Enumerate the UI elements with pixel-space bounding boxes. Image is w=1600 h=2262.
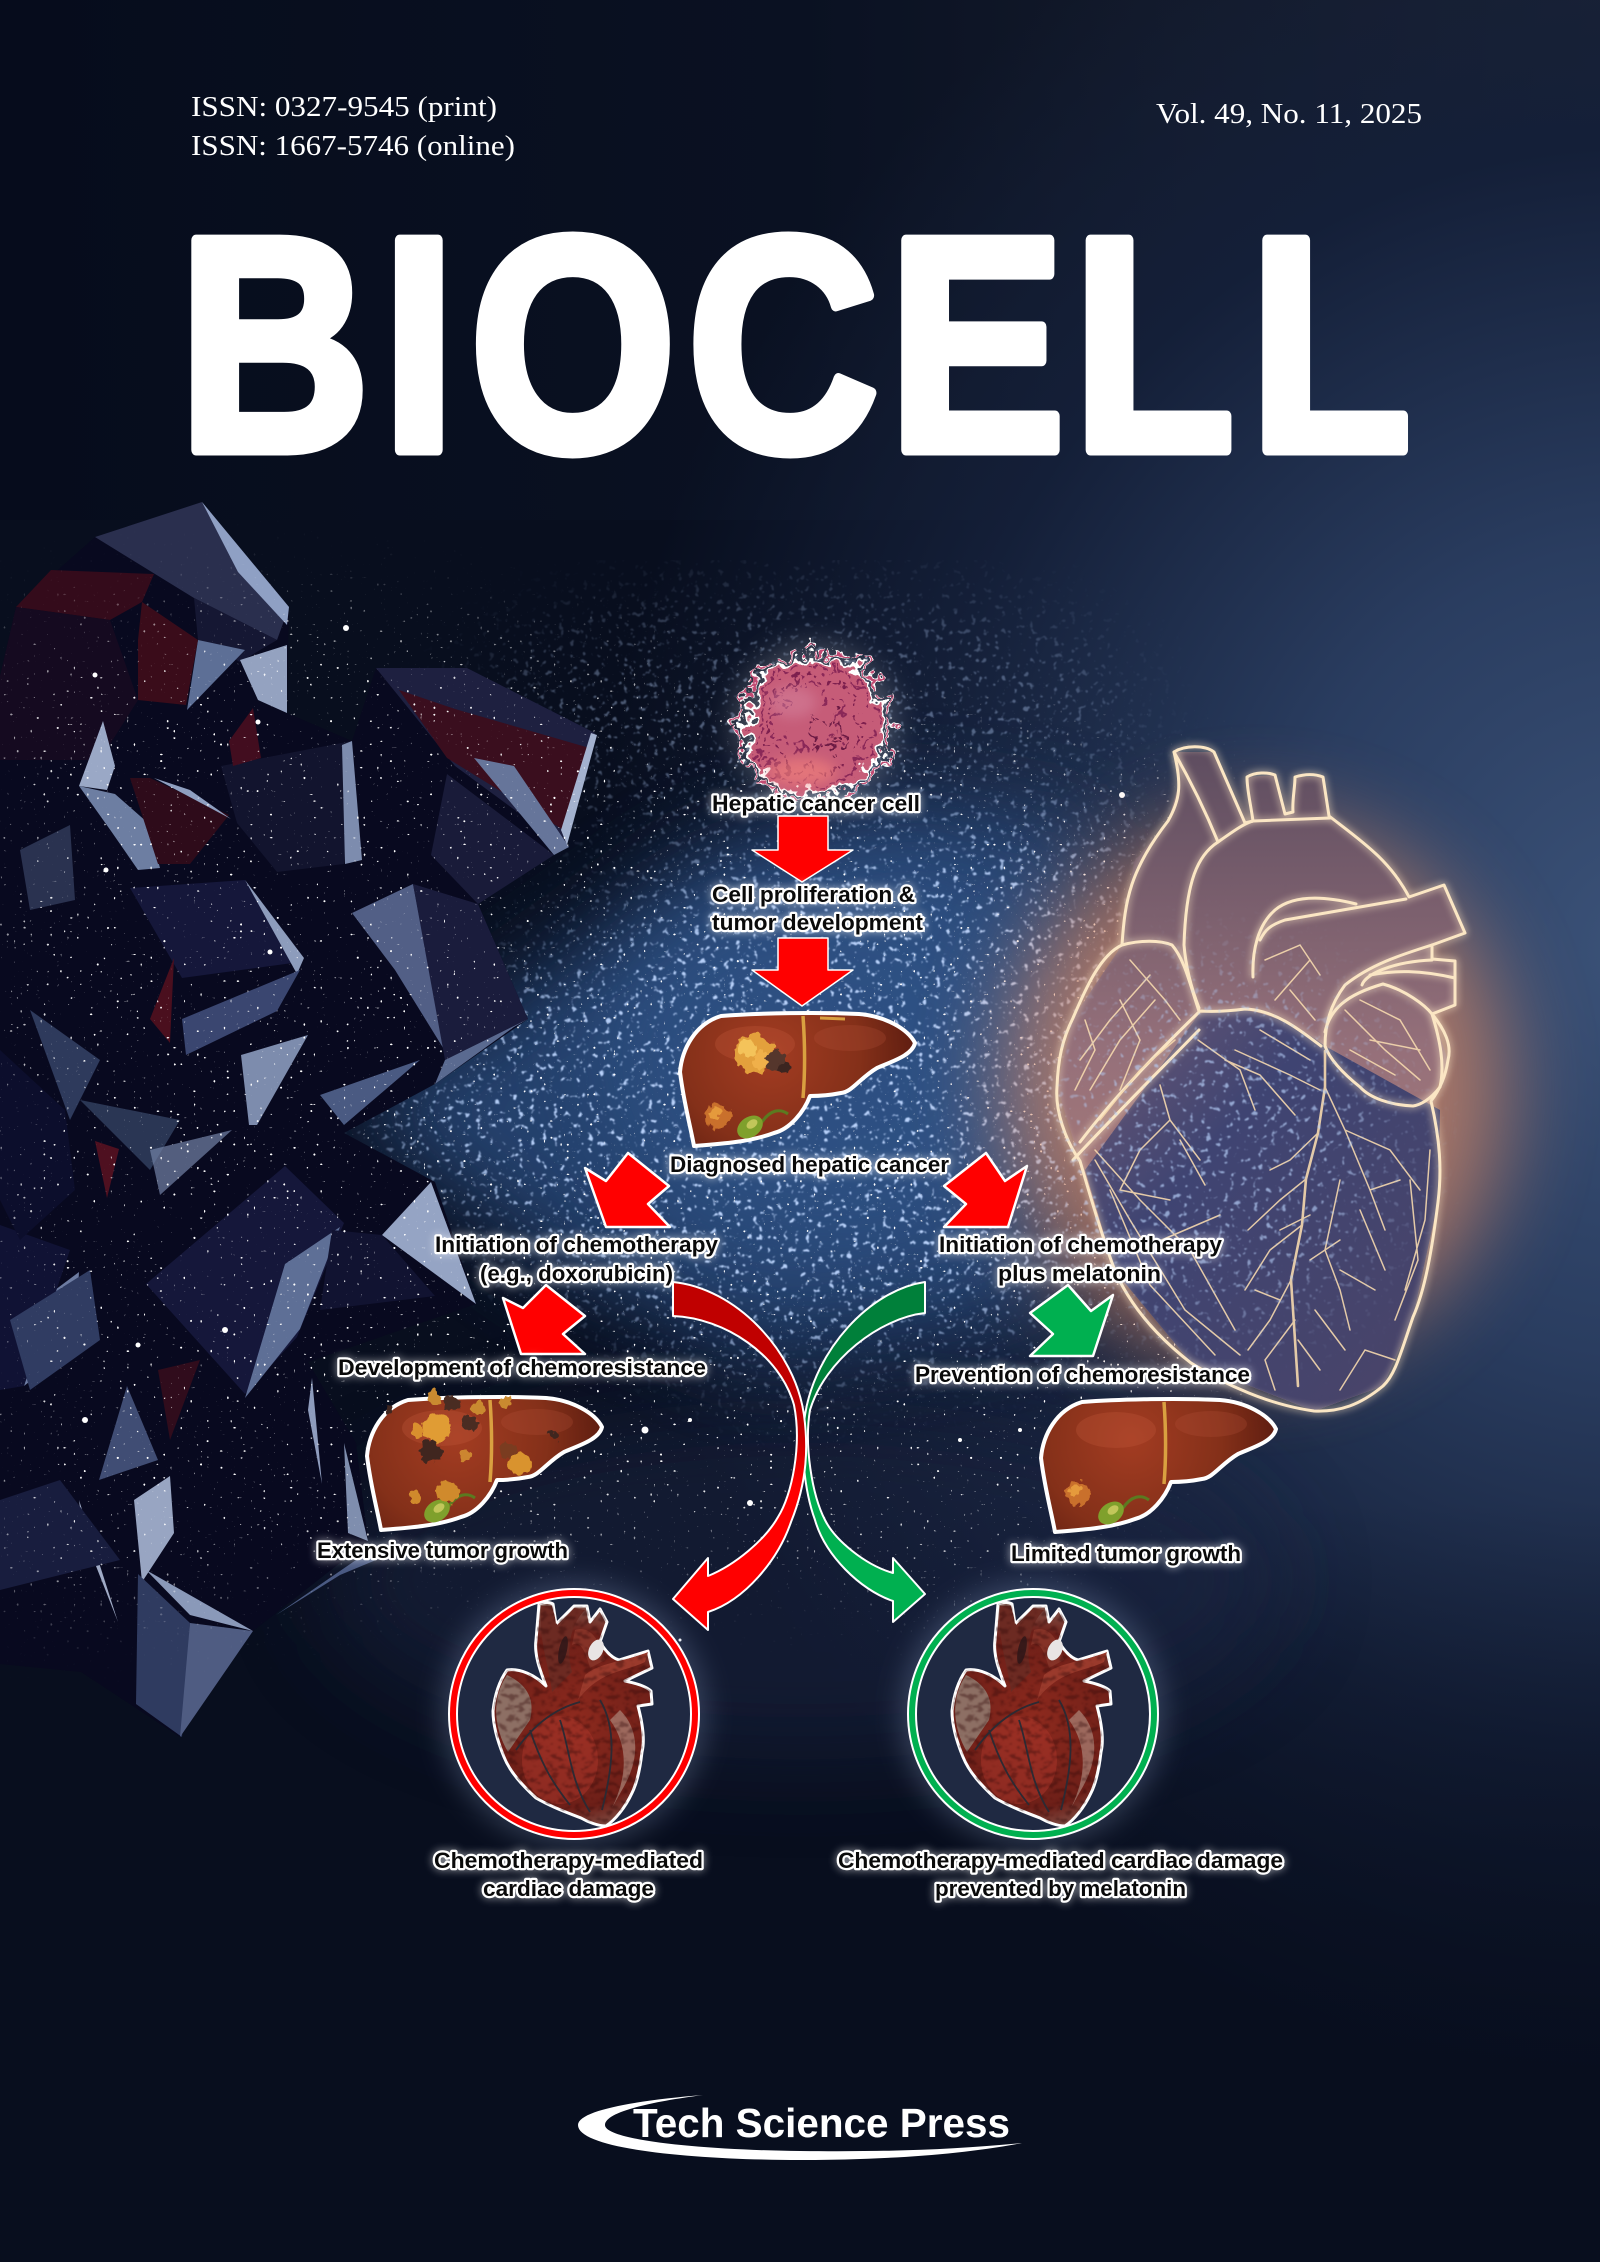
particle speckles [345, 560, 1161, 1428]
liver: diagnosed [680, 1013, 915, 1146]
label: initiation of chemotherapy: Initiation of chemotherapy [435, 1232, 718, 1257]
label: doxorubicin: (e.g., doxorubicin) [480, 1261, 673, 1286]
ring with heart: damaged [442, 1582, 706, 1846]
label: chemotherapy-mediated cardiac damage: Chemotherapy-mediated cardiac damage [838, 1848, 1283, 1873]
arrow: diagnosis to chemotherapy [585, 1153, 670, 1227]
starfield [0, 547, 1269, 1656]
label: extensive tumor growth: Extensive tumor growth [317, 1538, 568, 1563]
arrow: chemotherapy to chemoresistance [503, 1285, 585, 1354]
label: initiation of chemotherapy, melatonin arm: Initiation of chemotherapy [939, 1232, 1222, 1257]
heading info: volume: Vol. 49, No. 11, 2025 [1156, 98, 1422, 130]
curved arrow: red to damaged heart [673, 1282, 806, 1630]
title: BIOCELL [178, 174, 1411, 515]
label: tumor development: tumor development [712, 910, 924, 935]
heart interior speckles [1019, 926, 1434, 1366]
orange glow behind heart [1005, 820, 1505, 1360]
liver: limited tumor [1041, 1399, 1276, 1532]
label: chemotherapy-mediated: Chemotherapy-mediated [434, 1848, 703, 1873]
label: cell proliferation: Cell proliferation & [712, 882, 915, 907]
ring with heart: protected [901, 1582, 1165, 1846]
publisher logo [578, 2095, 1022, 2160]
crystal rock mass on the left [0, 502, 597, 1737]
lower ventricle fill [1085, 1009, 1440, 1411]
bright stars [82, 625, 1125, 1642]
icon: hepatic cancer cell [733, 644, 897, 808]
blue particle nebula [345, 800, 1130, 1360]
heading info: ISSN print: ISSN: 0327-9545 (print) [191, 91, 497, 123]
label: hepatic cancer cell: Hepatic cancer cell [712, 791, 920, 816]
arrow: cell to proliferation [752, 816, 853, 882]
arrow: diagnosis to chemotherapy plus melatonin [944, 1153, 1027, 1227]
arrow: melatonin to prevention [1030, 1285, 1113, 1356]
logo text: Tech Science Press [633, 2100, 1010, 2146]
label: limited tumor growth: Limited tumor growth [1011, 1541, 1241, 1566]
label: development of chemoresistance: Development of chemoresistance [338, 1355, 706, 1380]
label: prevention of chemoresistance: Prevention of chemoresistance [915, 1362, 1250, 1387]
glowing heart [1000, 747, 1465, 1420]
liver: extensive tumors [367, 1390, 602, 1530]
heart veins [1075, 945, 1430, 1390]
label: plus melatonin: plus melatonin [998, 1261, 1161, 1286]
logo swoosh [578, 2095, 1022, 2160]
heart outlines [1057, 747, 1465, 1411]
curved arrow: green to protected heart [803, 1282, 925, 1622]
arrow: proliferation to liver [752, 938, 853, 1006]
label: diagnosed hepatic cancer: Diagnosed hepatic cancer [670, 1152, 949, 1177]
label: prevented by melatonin: prevented by melatonin [935, 1876, 1186, 1901]
heart body fill [1057, 752, 1465, 1411]
heading info: ISSN online: ISSN: 1667-5746 (online) [191, 130, 515, 162]
label: cardiac damage: cardiac damage [483, 1876, 654, 1901]
